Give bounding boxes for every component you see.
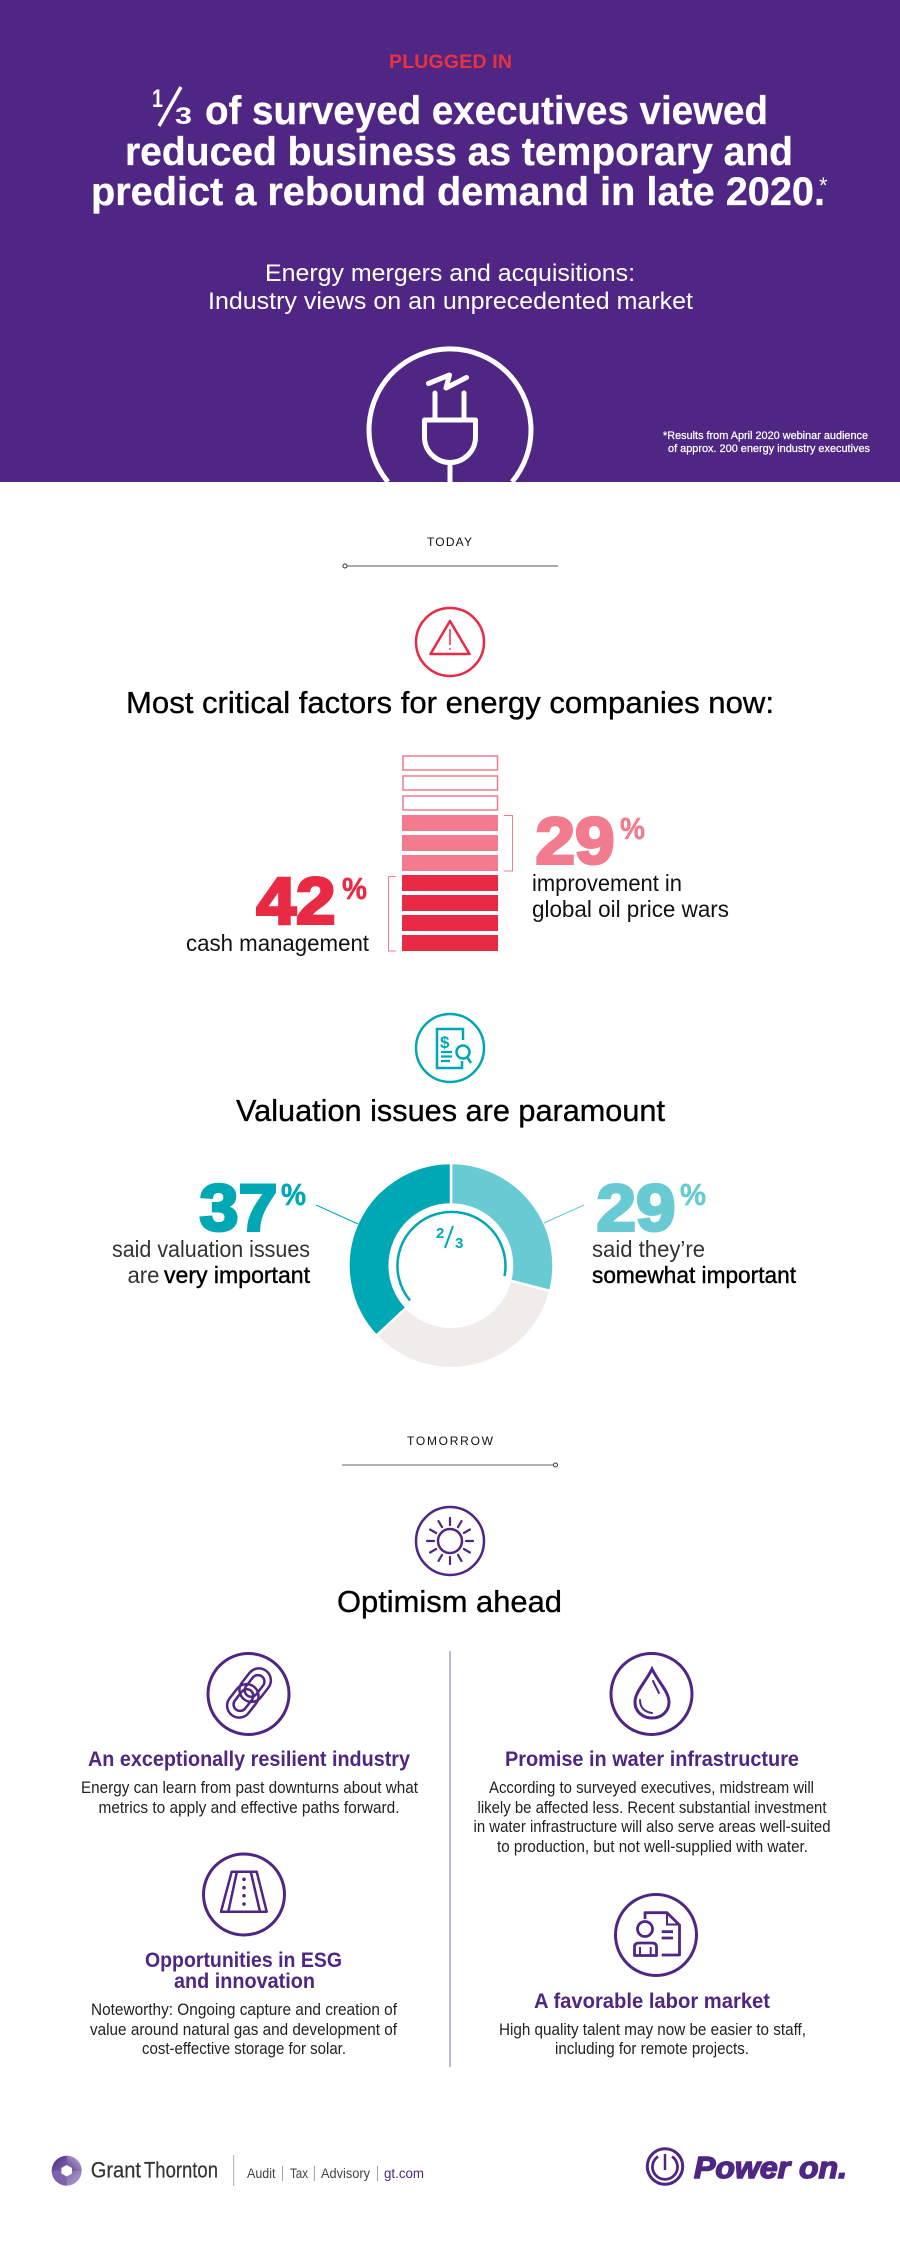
icon: water drop — [611, 1654, 692, 1734]
wordmark: Thornton — [144, 2158, 218, 2182]
item text: According to surveyed executives, midstream will — [489, 1778, 814, 1797]
stat: 29 percent oil price wars: improvement in — [532, 870, 682, 896]
item text — [81, 1778, 418, 1817]
icon: sun — [416, 1507, 484, 1575]
icon: power button — [647, 2149, 683, 2184]
subtitle: Industry views on an unprecedented market — [208, 288, 693, 315]
item text: High quality talent may now be easier to staff, — [499, 2020, 806, 2039]
services — [247, 2166, 424, 2181]
stat: 29 percent oil price wars — [532, 804, 729, 922]
item text: metrics to apply and effective paths forward. — [98, 1798, 400, 1817]
icon: valuation document: $ — [440, 1033, 450, 1052]
services: Tax — [290, 2166, 308, 2181]
stat: 37 percent very important — [112, 1170, 358, 1288]
icon: person and document — [616, 1894, 696, 1976]
icon: warning — [416, 608, 484, 676]
item: labor market — [499, 1894, 806, 2058]
item heading: An exceptionally resilient industry — [88, 1748, 410, 1771]
icon: chain link — [208, 1654, 289, 1734]
item text: cost-effective storage for solar. — [142, 2039, 346, 2058]
services: Advisory — [321, 2166, 370, 2181]
services: gt.com — [384, 2166, 424, 2181]
item heading: Promise in water infrastructure — [505, 1748, 799, 1771]
stat: 42 percent cash management: % — [342, 871, 367, 906]
stat: 29 percent somewhat important: 29 — [596, 1170, 676, 1244]
item: resilient industry — [81, 1654, 418, 1817]
footer: Power on logo — [647, 2149, 847, 2185]
item text: value around natural gas and development of — [90, 2020, 397, 2039]
section label: today — [343, 535, 558, 568]
wordmark — [91, 2158, 218, 2182]
divider: columns — [449, 1651, 451, 2067]
item text — [90, 2000, 397, 2058]
subtitle: Energy mergers and acquisitions: — [265, 260, 635, 287]
item text: Noteworthy: Ongoing capture and creation of — [91, 2000, 397, 2019]
icon: valuation document — [416, 1014, 484, 1082]
stat: 29 percent oil price wars: global oil price wars — [532, 896, 729, 922]
title: * — [819, 173, 828, 198]
footnote: *Results from April 2020 webinar audience — [663, 430, 868, 442]
wordmark: Grant — [91, 2158, 141, 2182]
item text: to production, but not well-supplied with water. — [497, 1837, 808, 1856]
chart: donut — [348, 1163, 554, 1368]
footnote: of approx. 200 energy industry executives — [668, 443, 870, 455]
stat: 37 percent very important: are — [128, 1262, 160, 1288]
section label: today: TODAY — [427, 535, 472, 549]
chart: stacked bars — [388, 756, 512, 951]
icon: road — [204, 1854, 284, 1935]
title — [91, 85, 828, 214]
section label: tomorrow — [342, 1434, 558, 1467]
item heading: Opportunities in ESG — [145, 1949, 342, 1972]
title: of surveyed executives viewed — [205, 89, 768, 133]
label: two thirds: 2 — [436, 1225, 444, 1242]
item heading: and innovation — [174, 1970, 315, 1993]
item heading — [145, 1949, 342, 1993]
stat: 42 percent cash management — [186, 864, 370, 956]
item text: including for remote projects. — [555, 2039, 749, 2058]
title: reduced business as temporary and — [125, 130, 793, 174]
footnote — [663, 430, 870, 455]
stat: 29 percent somewhat important — [544, 1170, 797, 1288]
heading: critical factors: Most critical factors for energy companies now: — [126, 685, 774, 720]
icon: Grant Thornton swirl — [52, 2156, 82, 2186]
wordmark: Power on. — [694, 2150, 847, 2185]
label: two thirds: 3 — [455, 1235, 463, 1252]
stat: 37 percent very important: % — [281, 1177, 306, 1212]
title: 3 — [175, 103, 192, 130]
item heading: A favorable labor market — [534, 1990, 770, 2013]
eyebrow: plugged in: PLUGGED IN — [389, 51, 512, 73]
stat: 29 percent somewhat important: said they’re — [592, 1236, 705, 1262]
item text — [474, 1778, 830, 1856]
stat: 42 percent cash management: cash management — [186, 930, 370, 956]
stat: 37 percent very important: said valuation issues — [112, 1236, 310, 1262]
footer: Grant Thornton logo — [52, 2155, 424, 2186]
item text: in water infrastructure will also serve areas well-suited — [474, 1817, 830, 1836]
stat: 29 percent somewhat important: % — [680, 1177, 706, 1212]
item text — [499, 2020, 806, 2058]
subtitle — [208, 260, 693, 315]
item: water infrastructure — [474, 1654, 830, 1856]
section label: tomorrow: TOMORROW — [407, 1434, 494, 1448]
stat: 37 percent very important: very important — [164, 1262, 311, 1288]
heading: optimism ahead: Optimism ahead — [337, 1584, 562, 1619]
icon: plug — [369, 349, 531, 482]
title: 1 — [152, 85, 163, 113]
stat: 37 percent very important: 37 — [200, 1170, 278, 1244]
stat: 29 percent somewhat important: somewhat important — [592, 1262, 797, 1288]
heading: valuation: Valuation issues are paramount — [236, 1093, 665, 1128]
item text: Energy can learn from past downturns about what — [81, 1778, 418, 1797]
stat: 29 percent oil price wars: 29 — [536, 804, 614, 878]
label: two thirds — [436, 1225, 463, 1252]
item: ESG and innovation — [90, 1854, 397, 2058]
title: predict a rebound demand in late 2020. — [91, 170, 825, 214]
panel: header — [0, 0, 900, 482]
inner arc: two thirds — [397, 1212, 505, 1300]
stat: 42 percent cash management: 42 — [256, 864, 336, 938]
stat: 29 percent oil price wars: % — [620, 811, 645, 846]
item text: likely be affected less. Recent substantial investment — [478, 1798, 827, 1817]
services: Audit — [247, 2166, 276, 2181]
